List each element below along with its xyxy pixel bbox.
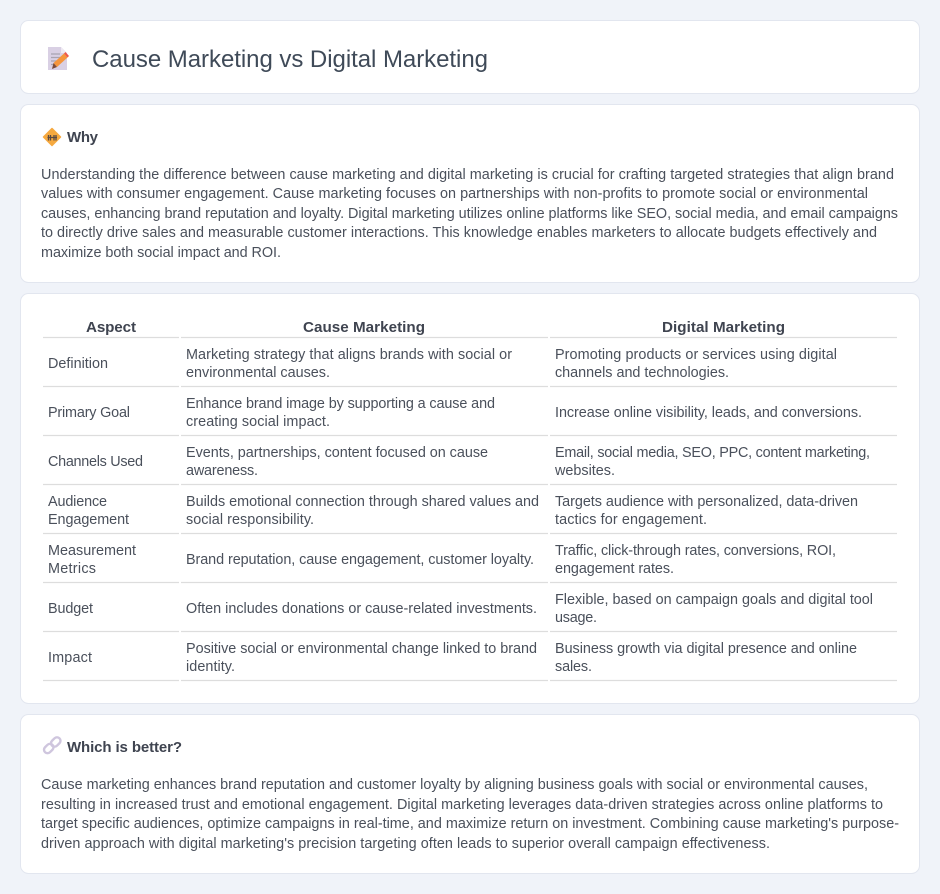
row: definition: Definition xyxy=(48,356,108,372)
row: channels used: Email, social media, SEO, PPC, content marketing, xyxy=(555,445,870,461)
text block: which is better paragraph xyxy=(41,777,899,852)
row: primary goal xyxy=(43,396,897,436)
row: impact: Business growth via digital presence and online xyxy=(555,641,857,657)
row: audience engagement: Audience xyxy=(48,494,107,510)
text block: which is better paragraph: driven approach with digital marketing's precision targeting often leads to superior overall campaign effectiveness. xyxy=(41,836,770,852)
row: audience engagement: Targets audience with personalized, data-driven xyxy=(555,494,858,510)
row: budget: Often includes donations or cause-related investments. xyxy=(186,601,537,617)
row: measurement metrics: Metrics xyxy=(48,561,96,577)
table header: Cause Marketing xyxy=(303,319,425,336)
row: audience engagement: Engagement xyxy=(48,512,129,528)
text block: which is better paragraph: Cause marketing enhances brand reputation and customer loyalty by aligning business goals with social or environmental causes, xyxy=(41,777,868,793)
panel: why xyxy=(20,104,920,282)
row: budget xyxy=(43,592,897,632)
row: definition: channels and technologies. xyxy=(555,365,729,381)
text block: why paragraph: to directly drive sales and measurable customer interactions. This knowledge enables marketers to allocate budgets effectively and xyxy=(41,225,877,241)
text block: why paragraph: maximize both social impact and ROI. xyxy=(41,245,281,261)
row: audience engagement: social responsibility. xyxy=(186,512,314,528)
icon: document with pencil xyxy=(48,47,69,70)
row: budget: usage. xyxy=(555,610,597,626)
text block: why paragraph xyxy=(41,167,898,261)
row: channels used: Events, partnerships, content focused on cause xyxy=(186,445,488,461)
row: channels used: awareness. xyxy=(186,463,258,479)
row: measurement metrics: Brand reputation, cause engagement, customer loyalty. xyxy=(186,552,534,568)
icon: chain link xyxy=(43,736,62,755)
text block: why paragraph: Understanding the difference between cause marketing and digital marketing is crucial for crafting targeted strategies that align brand xyxy=(41,167,894,183)
row: definition: environmental causes. xyxy=(186,365,330,381)
icon: orange diamond sign xyxy=(44,128,60,146)
row: budget: Flexible, based on campaign goals and digital tool xyxy=(555,592,873,608)
row: impact: identity. xyxy=(186,659,235,675)
row: audience engagement xyxy=(43,494,897,534)
row: measurement metrics xyxy=(43,543,897,582)
row: impact: Positive social or environmental change linked to brand xyxy=(186,641,537,657)
row: impact: Impact xyxy=(48,650,92,666)
text block: why paragraph: causes, enhancing brand reputation and loyalty. Digital marketing utilizes online platforms like SEO, social media, and email campaigns xyxy=(41,206,898,222)
table header: Aspect xyxy=(86,319,136,336)
row: primary goal: creating social impact. xyxy=(186,414,330,430)
row: audience engagement: tactics for engagement. xyxy=(555,512,707,528)
text block: which is better paragraph: target specific audiences, optimize campaigns in real-time, and maximize return on investment. Combining cause marketing's purpose- xyxy=(41,816,899,832)
row: channels used: Channels Used xyxy=(48,454,143,470)
row: budget: Budget xyxy=(48,601,93,617)
panel: comparison table xyxy=(20,294,920,704)
text block: why paragraph: values with consumer engagement. Cause marketing focuses on partnerships with non-profits to promote social or environmental xyxy=(41,186,868,202)
row: channels used: websites. xyxy=(554,463,615,479)
panel: title card xyxy=(20,20,920,94)
row: primary goal: Increase online visibility, leads, and conversions. xyxy=(555,405,862,421)
heading: why: Why xyxy=(67,129,99,146)
panel: which is better xyxy=(20,714,920,874)
row: definition: Promoting products or services using digital xyxy=(555,347,837,363)
heading: which is better: Which is better? xyxy=(67,739,182,756)
row: primary goal: Primary Goal xyxy=(48,405,130,421)
title: Cause Marketing vs Digital Marketing xyxy=(92,46,488,73)
row: primary goal: Enhance brand image by supporting a cause and xyxy=(186,396,495,412)
row: measurement metrics: engagement rates. xyxy=(555,561,674,577)
table header: Digital Marketing xyxy=(662,319,785,336)
row: impact: sales. xyxy=(555,659,592,675)
row: definition xyxy=(43,347,897,386)
row: definition: Marketing strategy that aligns brands with social or xyxy=(186,347,512,363)
table header xyxy=(43,319,897,338)
row: channels used xyxy=(43,445,897,484)
row: measurement metrics: Measurement xyxy=(48,543,136,559)
row: impact xyxy=(43,641,897,680)
text block: which is better paragraph: resulting in increased trust and emotional engagement. Digital marketing leverages data-driven strategies across online platforms to xyxy=(41,797,883,813)
row: audience engagement: Builds emotional connection through shared values and xyxy=(186,494,539,510)
row: measurement metrics: Traffic, click-through rates, conversions, ROI, xyxy=(555,543,836,559)
